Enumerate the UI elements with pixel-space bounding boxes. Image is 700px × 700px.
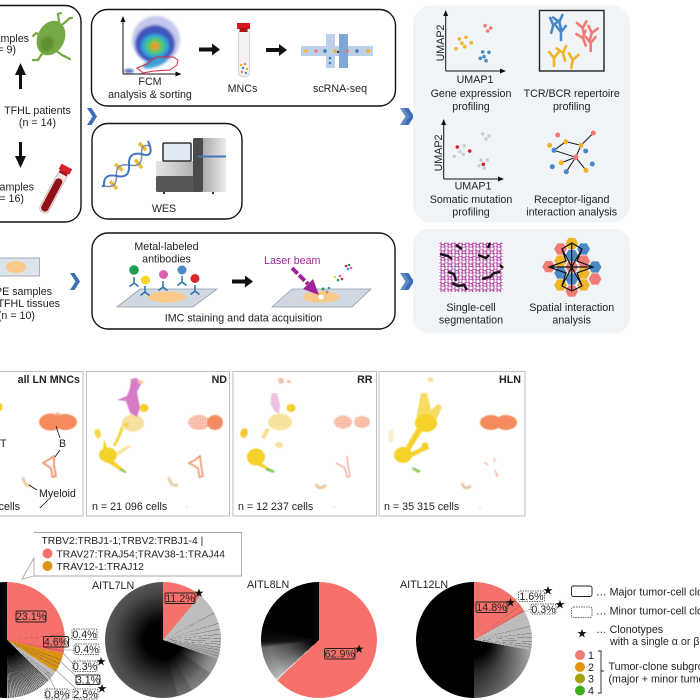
chart: UMAP all LN MNCs: all LN MNCs xyxy=(18,374,80,386)
chart: pie patient 1: 4.6% xyxy=(44,636,69,648)
panel: scRNA-seq workflow xyxy=(92,10,396,106)
chart: pie AITL12LN: AITL12LN xyxy=(400,579,448,591)
text: TFHL patients: TFHL patients xyxy=(4,105,71,117)
chart: UMAP HLN xyxy=(379,372,525,516)
chart: pie AITL8LN: 62.9% xyxy=(325,648,355,660)
text: scRNA-seq: scRNA-seq xyxy=(313,83,367,95)
panel: WES xyxy=(92,124,242,219)
chart: UMAP ND: n = 21 096 cells xyxy=(92,501,167,513)
chart: pie AITL12LN: ★ xyxy=(505,596,516,610)
chart: pie AITL8LN xyxy=(247,579,377,698)
text: somatic mutation profiling: Somatic mutation xyxy=(430,194,512,206)
icon: stained slide with antibodies xyxy=(117,265,217,307)
chart: pie AITL12LN xyxy=(400,579,565,698)
callout: clonotype key: TRBV2:TRBJ1-1;TRBV2:TRBJ1-4 | xyxy=(42,536,203,547)
legend: clones and subgroups: 3 xyxy=(588,674,594,686)
chart: pie patient 1: 23.1% xyxy=(16,611,47,623)
chart: UMAP all LN MNCs: B xyxy=(59,438,66,450)
text: TFHL patients: (n = 14) xyxy=(19,117,56,129)
icon: blood tube xyxy=(37,164,72,215)
chart: UMAP RR xyxy=(233,372,376,516)
arrow: chevrons to spatial analysis xyxy=(400,273,414,290)
chart: receptor-ligand network xyxy=(547,130,596,174)
legend: clones and subgroups: 1 xyxy=(588,650,594,662)
legend: clones and subgroups: ★ xyxy=(577,626,587,640)
arrow: MNCs to scRNA-seq xyxy=(266,44,287,56)
arrow: down to blood samples xyxy=(15,142,26,168)
callout: clonotype key: TRAV12-1:TRAJ12 xyxy=(56,562,144,573)
icon: laser ablation slide xyxy=(272,264,371,307)
text: single-cell segmentation: Single-cell xyxy=(446,302,496,314)
arrow: chevron to IMC xyxy=(70,273,80,290)
chart: pie AITL8LN: AITL8LN xyxy=(247,579,289,591)
text: spatial interaction analysis: Spatial interaction xyxy=(529,302,614,314)
text: WES: WES xyxy=(152,203,176,215)
chart: pie AITL12LN: ★ xyxy=(543,584,553,598)
arrow: chevron to sequencing xyxy=(87,108,97,125)
panel: spatial analyses xyxy=(413,229,630,334)
chart: pie AITL12LN: ★ xyxy=(555,598,565,612)
text: laser beam: Laser beam xyxy=(264,255,321,267)
text: receptor-ligand interaction analysis: Receptor-ligand xyxy=(534,194,609,206)
legend: clones and subgroups: 2 xyxy=(588,662,594,674)
chart: somatic mutation UMAP xyxy=(433,119,504,192)
chart: pie patient 1 xyxy=(0,582,107,700)
panel: patients and samples xyxy=(0,6,81,222)
icon: DNA helix xyxy=(102,141,151,189)
callout: clonotype key: TRAV27:TRAJ54;TRAV38-1:TRAJ44 xyxy=(56,550,225,560)
text: receptor-ligand interaction analysis: interaction analysis xyxy=(526,206,617,218)
text: MNCs: MNCs xyxy=(228,83,257,95)
icon: microfluidic chip xyxy=(301,34,373,68)
chart: UMAP HLN: n = 35 315 cells xyxy=(384,501,459,513)
chart: UMAP all LN MNCs: Myeloid xyxy=(39,488,76,500)
panel: profiling analyses xyxy=(413,6,630,222)
chart: pie AITL7LN: 11.2% xyxy=(165,593,195,605)
text: single-cell segmentation: segmentation xyxy=(439,314,503,326)
text: TCR/BCR repertoire profiling: profiling xyxy=(553,101,590,113)
chart: flow cytometry plot xyxy=(120,16,182,76)
text: metal-labeled antibodies: Metal-labeled xyxy=(134,241,199,253)
chart: UMAP ND: ND xyxy=(212,374,227,386)
chart: pie AITL7LN: ★ xyxy=(194,586,204,600)
chart: UMAP RR: n = 12 237 cells xyxy=(238,501,313,513)
text: TCR/BCR repertoire profiling: TCR/BCR repertoire xyxy=(524,88,620,100)
chart: UMAP all LN MNCs: T xyxy=(0,438,7,450)
text: IMC caption: IMC staining and data acquisition xyxy=(165,312,322,324)
icon: sequencer xyxy=(156,138,226,194)
chart: pie patient 1: 0.4% xyxy=(72,629,97,641)
chart: pie AITL12LN: 0.3% xyxy=(531,604,556,616)
text: FFPE samples xyxy=(0,258,60,322)
chart: pie patient 1: 0.3% xyxy=(73,661,98,673)
chart: UMAP HLN: HLN xyxy=(499,374,521,386)
legend: clones and subgroups: 4 xyxy=(588,686,594,698)
chart: gene expression UMAP xyxy=(435,10,506,86)
legend: clones and subgroups xyxy=(572,586,700,698)
text: spatial interaction analysis: analysis xyxy=(552,314,591,326)
arrow: up to lymph node samples xyxy=(15,63,26,89)
chart: UMAP all LN MNCs xyxy=(0,372,83,516)
legend: clones and subgroups: … Clonotypes xyxy=(596,624,663,636)
callout: clonotype key xyxy=(22,532,242,579)
icon: MNC tube xyxy=(237,23,250,77)
text: FCM label: FCM xyxy=(138,76,162,88)
chart: pie AITL12LN: 1.6% xyxy=(519,591,544,603)
chart: somatic mutation UMAP: UMAP2 xyxy=(433,135,445,171)
chart: UMAP RR: RR xyxy=(357,374,373,386)
panel: IMC staining xyxy=(92,233,395,329)
text: gene expression profiling: profiling xyxy=(452,101,490,113)
chart: pie AITL8LN: ★ xyxy=(354,642,364,656)
chart: UMAP ND xyxy=(86,372,230,516)
chart: spatial interaction hexagons xyxy=(542,238,602,297)
chart: TCR/BCR repertoire xyxy=(540,10,604,71)
arrow: staining to laser xyxy=(232,276,253,288)
chart: somatic mutation UMAP: UMAP1 xyxy=(455,180,491,192)
chart: pie patient 1: ★ xyxy=(97,682,107,696)
arrow: FCM to MNCs xyxy=(199,44,220,56)
arrow: chevrons to profiling xyxy=(400,108,414,125)
chart: pie patient 1: 0.4% xyxy=(74,644,99,656)
chart: gene expression UMAP: UMAP1 xyxy=(457,74,493,86)
text: somatic mutation profiling: profiling xyxy=(452,206,490,218)
image: single-cell segmentation xyxy=(439,242,503,292)
chart: pie AITL12LN: 14.8% xyxy=(476,602,507,614)
chart: pie patient 1: ★ xyxy=(96,654,106,668)
chart: gene expression UMAP: UMAP2 xyxy=(435,25,447,61)
icon: lymph node xyxy=(31,13,72,60)
text: metal-labeled antibodies: antibodies xyxy=(142,254,191,266)
chart: pie AITL7LN xyxy=(92,580,221,698)
text: gene expression profiling: Gene expression xyxy=(431,88,511,100)
chart: pie AITL7LN: AITL7LN xyxy=(92,580,134,592)
chart: pie patient 1: 3.1% xyxy=(76,674,101,686)
text: FCM label: analysis & sorting xyxy=(108,89,192,101)
